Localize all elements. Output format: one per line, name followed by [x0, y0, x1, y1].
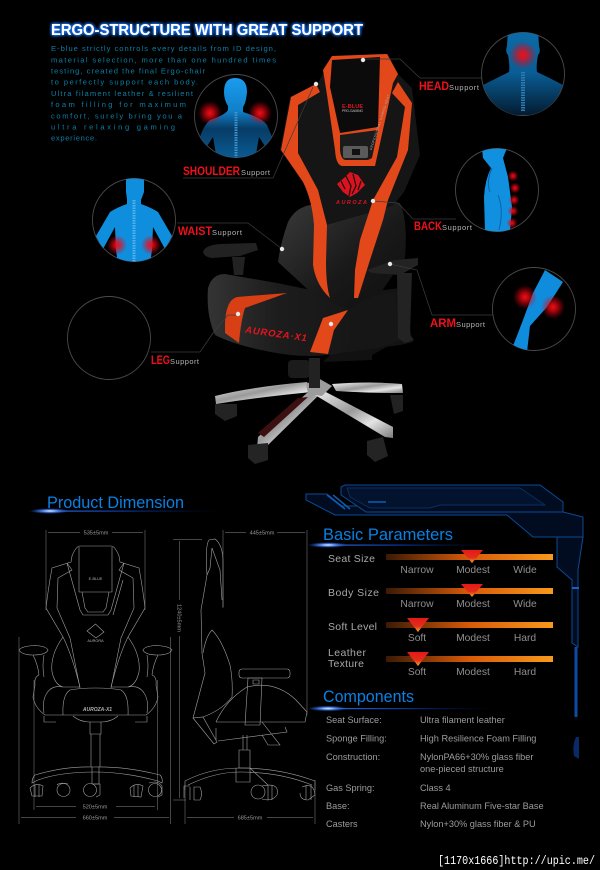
label: head: Support — [449, 83, 480, 92]
intro text block: material selection, more than one hundred times — [51, 55, 276, 64]
icon: right armrest — [350, 258, 418, 352]
panel: body size: Wide — [513, 599, 537, 610]
label: arm: Support — [456, 320, 486, 329]
label: waist: Support — [212, 228, 243, 237]
text: vertical chair slogan: PROFESSIONAL GAMING SEAT — [369, 94, 391, 151]
table: components list — [326, 715, 544, 829]
dimension lines: front — [19, 530, 170, 824]
intro text block: to perfectly support each body. — [51, 78, 198, 87]
panel: arm support — [430, 268, 576, 352]
intro text block: Ultra filament leather & resilient — [51, 89, 194, 98]
heading: basic parameters: Basic Parameters — [323, 526, 453, 544]
panel: body size — [328, 584, 553, 610]
panel: body size: Narrow — [400, 599, 434, 610]
intro text block: E-blue strictly controls every details from ID design, — [51, 44, 276, 53]
table: components list: Gas Spring: — [326, 783, 375, 793]
panel: front dimension drawing — [19, 530, 172, 824]
intro text block: experience. — [51, 134, 97, 143]
panel: body size: Modest — [456, 599, 490, 610]
intro text block: foam filling for maximum — [51, 100, 186, 109]
label: dimensions side: 445±5mm — [250, 530, 275, 536]
table: components list: Real Aluminum Five-star Base — [420, 801, 544, 811]
table: components list: Casters — [326, 819, 358, 829]
text: front chair marks: AUROZA-X1 — [82, 707, 112, 713]
text: front chair marks: AURORA — [87, 639, 104, 643]
panel: leather texture — [328, 647, 553, 678]
table: components list: one-pieced structure — [420, 764, 504, 774]
panel: seat size: Wide — [513, 565, 537, 576]
title: ERGO-STRUCTURE WITH GREAT SUPPORT — [51, 22, 364, 39]
icon: chair backrest — [278, 54, 420, 315]
text: seat logo: AUROZA·X1 — [243, 325, 307, 344]
icon: shoulder body — [198, 78, 272, 160]
icon: left armrest — [203, 243, 258, 275]
panel: leather texture: Hard — [514, 667, 536, 678]
panel: chair photo — [203, 54, 420, 464]
label: head — [419, 79, 480, 93]
panel: seat size: Narrow — [400, 565, 434, 576]
panel: soft level: Modest — [456, 633, 490, 644]
heading: components — [307, 688, 492, 712]
table: components list: High Resilience Foam Filling — [420, 734, 536, 744]
text: head logo: PRO-GAMING — [342, 109, 363, 113]
table: components list: Class 4 — [420, 783, 451, 793]
intro text block: testing, created the final Ergo-chair — [51, 66, 205, 76]
icon: chair seat — [208, 274, 413, 362]
panel: seat size: Modest — [456, 565, 490, 576]
label: arm: ARM — [430, 316, 456, 330]
icon: waist body — [96, 178, 172, 264]
label: dimensions side: 1240±5mm — [176, 604, 182, 632]
panel: soft level: Soft Level — [328, 621, 377, 633]
text: AUROZA logo: AUROZA — [335, 200, 367, 206]
label: dimensions front — [83, 530, 109, 822]
table: components list: Base: — [326, 801, 350, 811]
table: components list: Sponge Filling: — [326, 734, 387, 744]
text: front chair marks: E-BLUE — [89, 577, 103, 581]
panel: body size: Body Size — [328, 587, 379, 599]
icon: side body — [482, 148, 520, 232]
text: front chair marks — [82, 577, 112, 713]
panel: waist support — [92, 178, 243, 264]
table: components list: Nylon+30% glass fiber & PU — [420, 819, 536, 829]
label: dimensions side — [176, 530, 275, 822]
label: leg: LEG — [151, 353, 170, 367]
panel: leather texture: Modest — [456, 667, 490, 678]
text: head logo — [342, 104, 363, 113]
leader lines — [151, 59, 493, 352]
label: back: BACK — [414, 219, 442, 233]
label: shoulder: Support — [241, 168, 271, 177]
panel: leather texture: Texture — [328, 658, 364, 670]
icon: neck body — [483, 30, 563, 115]
panel: leather texture: Leather — [328, 647, 366, 659]
label: back — [414, 219, 473, 233]
panel: leg support — [68, 296, 200, 380]
heading: components: Components — [323, 688, 414, 706]
icon: arm body — [513, 270, 565, 352]
panel: shoulder support — [183, 74, 278, 178]
label: back: Support — [442, 223, 473, 232]
label: dimensions side: 685±5mm — [238, 816, 263, 822]
label: leg — [151, 353, 200, 367]
label: arm — [430, 316, 486, 330]
table: components list: Seat Surface: — [326, 715, 382, 725]
table: components list: Ultra filament leather — [420, 715, 505, 725]
table: components list: NylonPA66+30% glass fiber — [420, 752, 533, 762]
label: shoulder: SHOULDER — [183, 164, 240, 178]
heading: product dimension — [28, 494, 218, 514]
intro text block: comfort, surely bring you a — [51, 111, 183, 120]
intro text block — [51, 44, 276, 143]
label: waist: WAIST — [178, 224, 213, 238]
panel: soft level: Hard — [514, 633, 536, 644]
label: waist — [178, 224, 243, 238]
decorative frame: HUD — [306, 485, 583, 759]
label: dimensions front: 660±5mm — [83, 816, 108, 822]
panel: soft level — [328, 618, 553, 644]
chair marker dots — [236, 58, 392, 326]
label: dimensions front: 520±5mm — [83, 804, 108, 810]
panel: head support — [419, 30, 564, 116]
intro text block: ultra relaxing gaming — [51, 122, 175, 132]
icon: dragon logo — [337, 172, 365, 197]
panel: back support — [414, 148, 538, 233]
dimension lines: side — [173, 530, 315, 824]
heading: product dimension: Product Dimension — [47, 494, 184, 512]
heading: basic parameters — [307, 526, 492, 548]
panel: seat size — [328, 550, 553, 576]
panel: soft level: Soft — [408, 633, 426, 644]
table: components list: Construction: — [326, 752, 380, 762]
icon: side chair line art — [184, 539, 315, 800]
icon: chair base — [215, 358, 403, 464]
text: head logo: E-BLUE — [342, 104, 363, 110]
label: leg: Support — [170, 357, 200, 366]
label: dimensions front: 535±5mm — [84, 530, 109, 536]
panel: leather texture: Soft — [408, 667, 426, 678]
panel: side dimension drawing — [173, 530, 315, 824]
label: head: HEAD — [419, 79, 449, 93]
icon: front chair line art — [19, 546, 172, 797]
panel: seat size: Seat Size — [328, 553, 375, 565]
